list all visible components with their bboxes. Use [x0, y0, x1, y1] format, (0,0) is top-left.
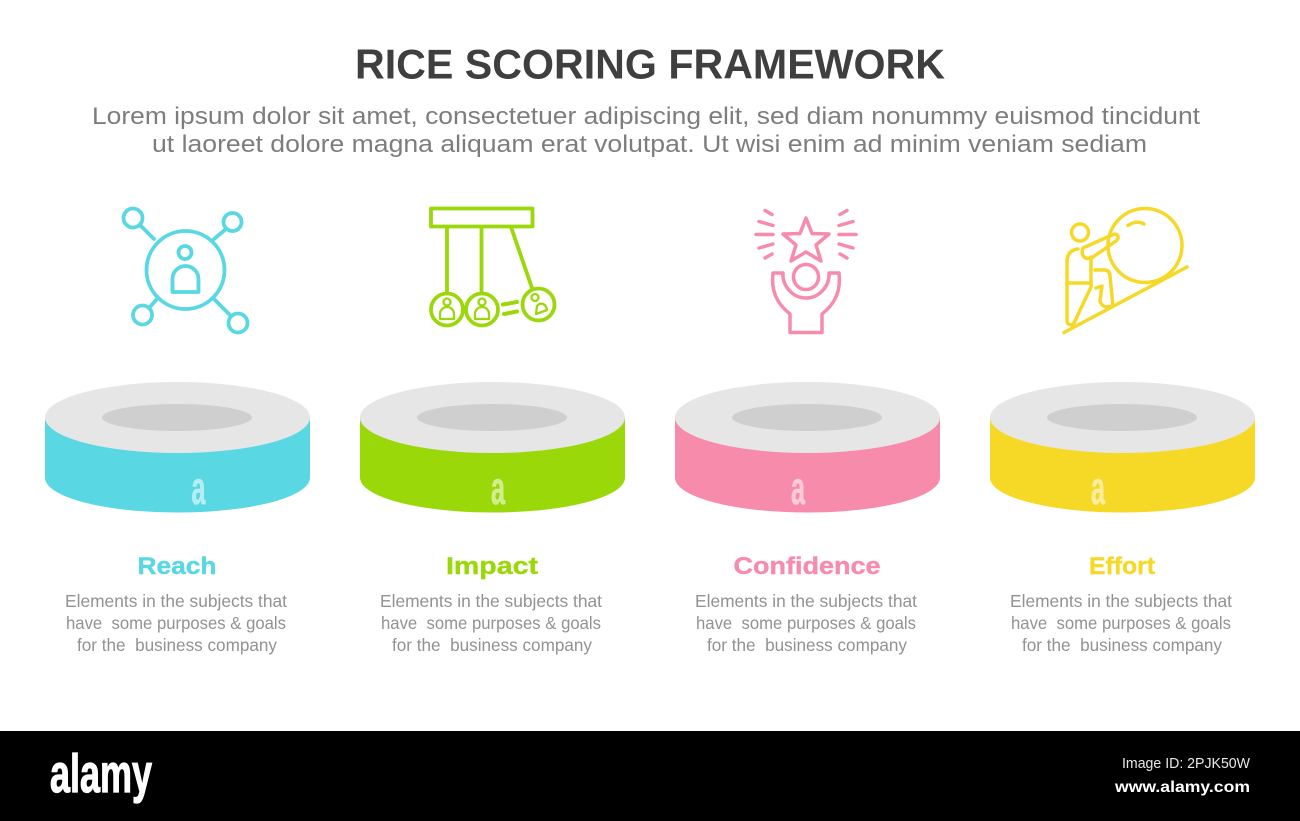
text block: impact [380, 591, 602, 655]
heading: effort: Effort [1089, 553, 1155, 580]
text block: confidence [695, 591, 917, 655]
cylinder: reach: a [192, 462, 206, 514]
image id: Image ID: 2PJK50W [1122, 755, 1251, 772]
panel: effort [990, 208, 1255, 655]
text block: confidence: have some purposes & goals [696, 613, 916, 633]
cylinder: reach [45, 382, 310, 514]
cylinder: impact: a [491, 462, 505, 514]
text block: effort: for the business company [1022, 635, 1222, 655]
website: www.alamy.com [1114, 779, 1250, 796]
cylinder: impact [360, 382, 625, 514]
panel: impact [360, 208, 625, 655]
text block: reach: have some purposes & goals [66, 613, 286, 633]
text block: confidence: for the business company [707, 635, 907, 655]
icon: newton cradle [431, 208, 554, 326]
text block: reach: for the business company [77, 635, 277, 655]
text block: effort [1010, 591, 1232, 655]
cylinder: confidence [675, 382, 940, 514]
subtitle text block: ut laoreet dolore magna aliquam erat volutpat. Ut wisi enim ad minim veniam sediam [152, 131, 1147, 158]
heading: confidence: Confidence [734, 553, 880, 580]
text block: effort: have some purposes & goals [1011, 613, 1231, 633]
logo: alamy: alamy [50, 744, 152, 804]
cylinder: confidence: a [791, 462, 805, 514]
panel: confidence [675, 210, 940, 655]
text block: reach: Elements in the subjects that [65, 591, 287, 611]
cylinder: effort: a [1091, 462, 1105, 514]
heading: reach: Reach [138, 553, 216, 580]
icon: reach network [124, 208, 248, 332]
text block: reach [65, 591, 287, 655]
text block: impact: have some purposes & goals [381, 613, 601, 633]
title: RICE SCORING FRAMEWORK [355, 40, 945, 88]
text block: confidence: Elements in the subjects that [695, 591, 917, 611]
panel: reach [45, 208, 310, 655]
heading: impact: Impact [446, 553, 538, 580]
text block: impact: for the business company [392, 635, 592, 655]
subtitle text block [92, 103, 1200, 158]
icon: person raising star [756, 210, 856, 332]
watermark footer bar [0, 731, 1300, 821]
icon: person pushing boulder [1064, 208, 1187, 332]
text block: effort: Elements in the subjects that [1010, 591, 1232, 611]
cylinder: effort [990, 382, 1255, 514]
subtitle text block: Lorem ipsum dolor sit amet, consectetuer adipiscing elit, sed diam nonummy euismod tincidunt [92, 103, 1200, 130]
text block: impact: Elements in the subjects that [380, 591, 602, 611]
